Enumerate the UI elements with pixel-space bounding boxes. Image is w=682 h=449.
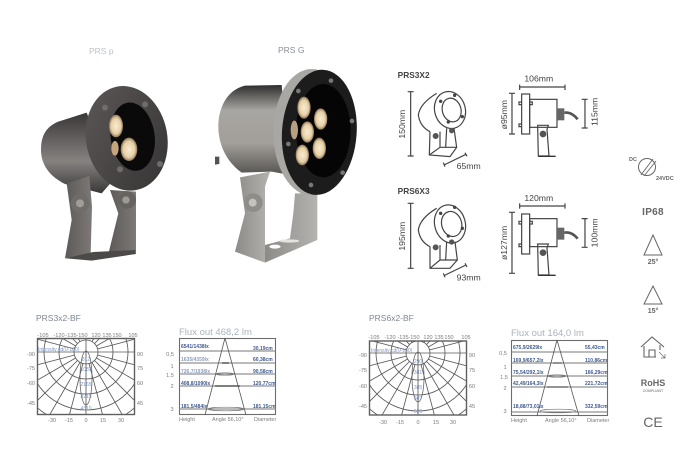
icon: beam 25 degrees: 25°: [648, 258, 658, 266]
drawing: PRS6X3: 195mm: [397, 222, 407, 251]
polar chart: PRS6x2-BF: -15: [396, 420, 404, 426]
polar chart: PRS3x2-BF: -15: [65, 418, 73, 424]
polar chart: PRS3x2-BF: 1083: [80, 367, 92, 373]
polar chart: PRS6x2-BF: [359, 335, 475, 424]
flux chart: PRS3x2-BF: 726,7/1938lx: [181, 369, 210, 375]
polar chart: PRS6x2-BF: 30: [450, 420, 456, 426]
flux chart: PRS6x2-BF: 1: [503, 365, 507, 371]
flux chart: PRS3x2-BF: Angle 56,10°: [212, 417, 244, 423]
flux chart: PRS6x2-BF: 3: [503, 409, 507, 415]
polar chart: PRS3x2-BF: 30: [118, 418, 124, 424]
drawing: PRS6X3: 93mm: [457, 273, 481, 283]
polar chart: PRS6x2-BF: 150: [444, 335, 454, 341]
drawing: PRS6X3: PRS6X3: [398, 186, 430, 196]
flux chart heading: Flux out 468,2 lm: [179, 327, 252, 338]
flux chart: PRS6x2-BF: 166,29cm: [585, 370, 608, 376]
polar chart: PRS3x2-BF: 0: [84, 418, 88, 424]
drawing: PRS6X3: [397, 186, 600, 283]
icon: DC 24VDC: [629, 157, 674, 182]
polar chart: PRS6x2-BF: 105: [461, 335, 471, 341]
polar chart: PRS3x2-BF: 120: [91, 333, 101, 339]
flux chart heading: Flux out 164,0 lm: [511, 328, 584, 339]
icon: DC 24VDC: DC: [629, 157, 637, 163]
flux chart: PRS3x2-BF: Diameter: [254, 417, 276, 423]
polar chart: PRS3x2-BF: 3219: [80, 394, 92, 400]
flux chart: PRS3x2-BF: 60,38cm: [253, 357, 273, 363]
icon: RoHS compliant: COMPLIANT: [643, 389, 664, 393]
heading: PRS p: PRS p: [89, 46, 114, 56]
flux chart: PRS6x2-BF: Angle 56,10°: [545, 418, 577, 424]
icon: DC 24VDC: 24VDC: [656, 176, 674, 182]
polar chart: PRS6x2-BF: -135: [397, 335, 409, 341]
polar chart: PRS6x2-BF: 290: [414, 359, 422, 365]
flux chart: PRS3x2-BF: 1635/4359lx: [181, 357, 209, 363]
flux chart: PRS3x2-BF: 1: [170, 364, 174, 370]
dimension drawings: [397, 70, 600, 283]
flux chart: PRS3x2-BF: [166, 338, 276, 423]
polar chart: PRS3x2-BF: [27, 333, 143, 422]
polar chart: PRS6x2-BF: 381: [414, 370, 422, 376]
flux chart: PRS6x2-BF: 18,88/73,01lx: [513, 404, 544, 410]
polar chart: PRS6x2-BF: -120: [384, 335, 396, 341]
polar chart: PRS3x2-BF: -150: [76, 333, 88, 339]
heading: PRS G: PRS G: [278, 45, 304, 55]
flux chart: PRS6x2-BF: 75,54/292,1lx: [513, 370, 544, 376]
polar chart: PRS3x2-BF: -120: [53, 333, 65, 339]
polar chart: PRS3x2-BF: 2165: [80, 382, 92, 388]
flux chart: PRS3x2-BF: 181,5/484lx: [181, 404, 208, 410]
flux chart: PRS3x2-BF: 3: [170, 407, 174, 413]
polar chart: PRS6x2-BF: -105: [368, 335, 380, 341]
polar chart: PRS6x2-BF: -150: [408, 335, 420, 341]
flux chart: PRS6x2-BF: 55,43cm: [585, 345, 605, 351]
polar chart: PRS6x2-BF: 60: [469, 384, 475, 390]
polar chart: PRS6x2-BF: 507: [414, 396, 422, 402]
polar chart: PRS6x2-BF: -30: [379, 420, 387, 426]
flux chart: PRS3x2-BF: 90,58cm: [253, 369, 273, 375]
icon: outdoor house: [641, 337, 665, 358]
flux chart: PRS6x2-BF: 169,9/657,2lx: [513, 358, 544, 364]
flux chart: PRS3x2-BF: 181,15cm: [253, 404, 276, 410]
flux chart: PRS3x2-BF: 120,77cm: [253, 381, 276, 387]
product photo: PRS p spotlight: [41, 79, 176, 261]
polar chart: PRS3x2-BF: 150: [112, 333, 122, 339]
drawing: PRS6X3: 100mm: [590, 218, 600, 247]
polar chart: PRS6x2-BF: -45: [359, 404, 367, 410]
flux chart: PRS3x2-BF: 6541/1438lx: [181, 344, 209, 350]
drawing: PRS3X2: 150mm: [397, 110, 407, 139]
polar chart: PRS6x2-BF: 120: [423, 335, 433, 341]
polar chart: PRS3x2-BF: -90: [27, 352, 35, 358]
polar chart: PRS6x2-BF: -60: [359, 384, 367, 390]
polar chart: PRS6x2-BF: 75: [469, 368, 475, 374]
flux chart: PRS6x2-BF: Diameter: [587, 418, 609, 424]
icon: CE mark: CE: [643, 414, 663, 430]
drawing: PRS6X3: ø127mm: [499, 226, 509, 260]
icon: beam 15 degrees: [644, 286, 662, 315]
polar chart: PRS6x2-BF: 385: [414, 385, 422, 391]
flux chart: PRS6x2-BF: Height: [511, 418, 527, 424]
drawing: PRS3X2: PRS3X2: [398, 70, 430, 80]
flux chart: PRS3x2-BF: Height: [179, 417, 195, 423]
flux chart: PRS3x2-BF: 0,5: [166, 352, 174, 358]
drawing: PRS3X2: ø95mm: [499, 100, 509, 129]
polar chart: PRS3x2-BF: -45: [27, 401, 35, 407]
polar chart: PRS3x2-BF: 812: [82, 357, 90, 363]
polar chart: PRS6x2-BF: -75: [359, 368, 367, 374]
product photo: PRS G spotlight: [215, 67, 361, 263]
polar chart: PRS6x2-BF: 0: [416, 420, 420, 426]
icon: RoHS compliant: RoHS: [641, 378, 665, 388]
polar chart: PRS6x2-BF: 135: [434, 335, 444, 341]
flux chart: PRS3x2-BF: 30,19cm: [253, 346, 273, 352]
drawing: PRS3X2: [397, 70, 600, 171]
flux chart: PRS3x2-BF: 2: [170, 384, 174, 390]
polar chart: PRS3x2-BF: 135: [102, 333, 112, 339]
polar chart: PRS3x2-BF: 4310: [80, 406, 92, 412]
polar chart: PRS3x2-BF: 90: [137, 352, 143, 358]
flux chart: PRS6x2-BF: 1,5: [500, 375, 508, 381]
flux chart: PRS6x2-BF: 110,86cm: [585, 358, 608, 364]
polar chart: PRS6x2-BF: 15: [433, 420, 439, 426]
flux chart: PRS6x2-BF: 0,5: [499, 351, 507, 357]
polar chart: PRS3x2-BF: 60: [137, 381, 143, 387]
polar chart: PRS3x2-BF: -135: [65, 333, 77, 339]
flux chart: PRS6x2-BF: [499, 340, 609, 424]
flux chart: PRS6x2-BF: 675,9/2629lx: [513, 345, 542, 351]
icon: beam 15 degrees: 15°: [648, 307, 658, 315]
polar chart: PRS3x2-BF: -75: [27, 366, 35, 372]
flux chart: PRS6x2-BF: 42,49/164,3lx: [513, 381, 544, 387]
drawing: PRS6X3: 120mm: [524, 193, 553, 203]
polar chart: PRS3x2-BF: 105: [128, 333, 138, 339]
polar chart: PRS3x2-BF: Intensity cd(0-180): [38, 347, 80, 353]
polar chart: PRS3x2-BF: -60: [27, 381, 35, 387]
icon: beam 25 degrees: [644, 235, 662, 266]
polar chart: PRS3x2-BF: 15: [100, 418, 106, 424]
flux chart: PRS6x2-BF: 2: [503, 386, 507, 392]
polar chart: PRS6x2-BF: Intensity cd(0-180): [371, 348, 413, 354]
flux chart: PRS3x2-BF: 408,8/1090lx: [181, 381, 210, 387]
polar chart: PRS3x2-BF: -30: [48, 418, 56, 424]
polar chart: PRS6x2-BF: 620: [414, 409, 422, 415]
drawing: PRS3X2: 65mm: [457, 161, 481, 171]
drawing: PRS3X2: 106mm: [524, 73, 553, 83]
polar chart heading: PRS3x2-BF: PRS3x2-BF: [36, 313, 81, 323]
flux chart: PRS6x2-BF: 332,59cm: [585, 404, 608, 410]
polar chart: PRS6x2-BF: 90: [469, 353, 475, 359]
icon: RoHS compliant: [641, 378, 665, 393]
polar chart: PRS3x2-BF: 75: [137, 366, 143, 372]
polar chart heading: PRS6x2-BF: PRS6x2-BF: [369, 313, 414, 323]
polar chart: PRS3x2-BF: 45: [137, 401, 143, 407]
drawing: PRS3X2: 115mm: [590, 98, 600, 126]
icon: IP68: IP68: [642, 207, 664, 218]
flux chart: PRS6x2-BF: 221,72cm: [585, 381, 608, 387]
flux chart: PRS3x2-BF: 1,5: [166, 373, 174, 379]
polar chart: PRS6x2-BF: 45: [469, 404, 475, 410]
polar chart: PRS3x2-BF: -105: [37, 333, 49, 339]
polar chart: PRS6x2-BF: -90: [359, 353, 367, 359]
